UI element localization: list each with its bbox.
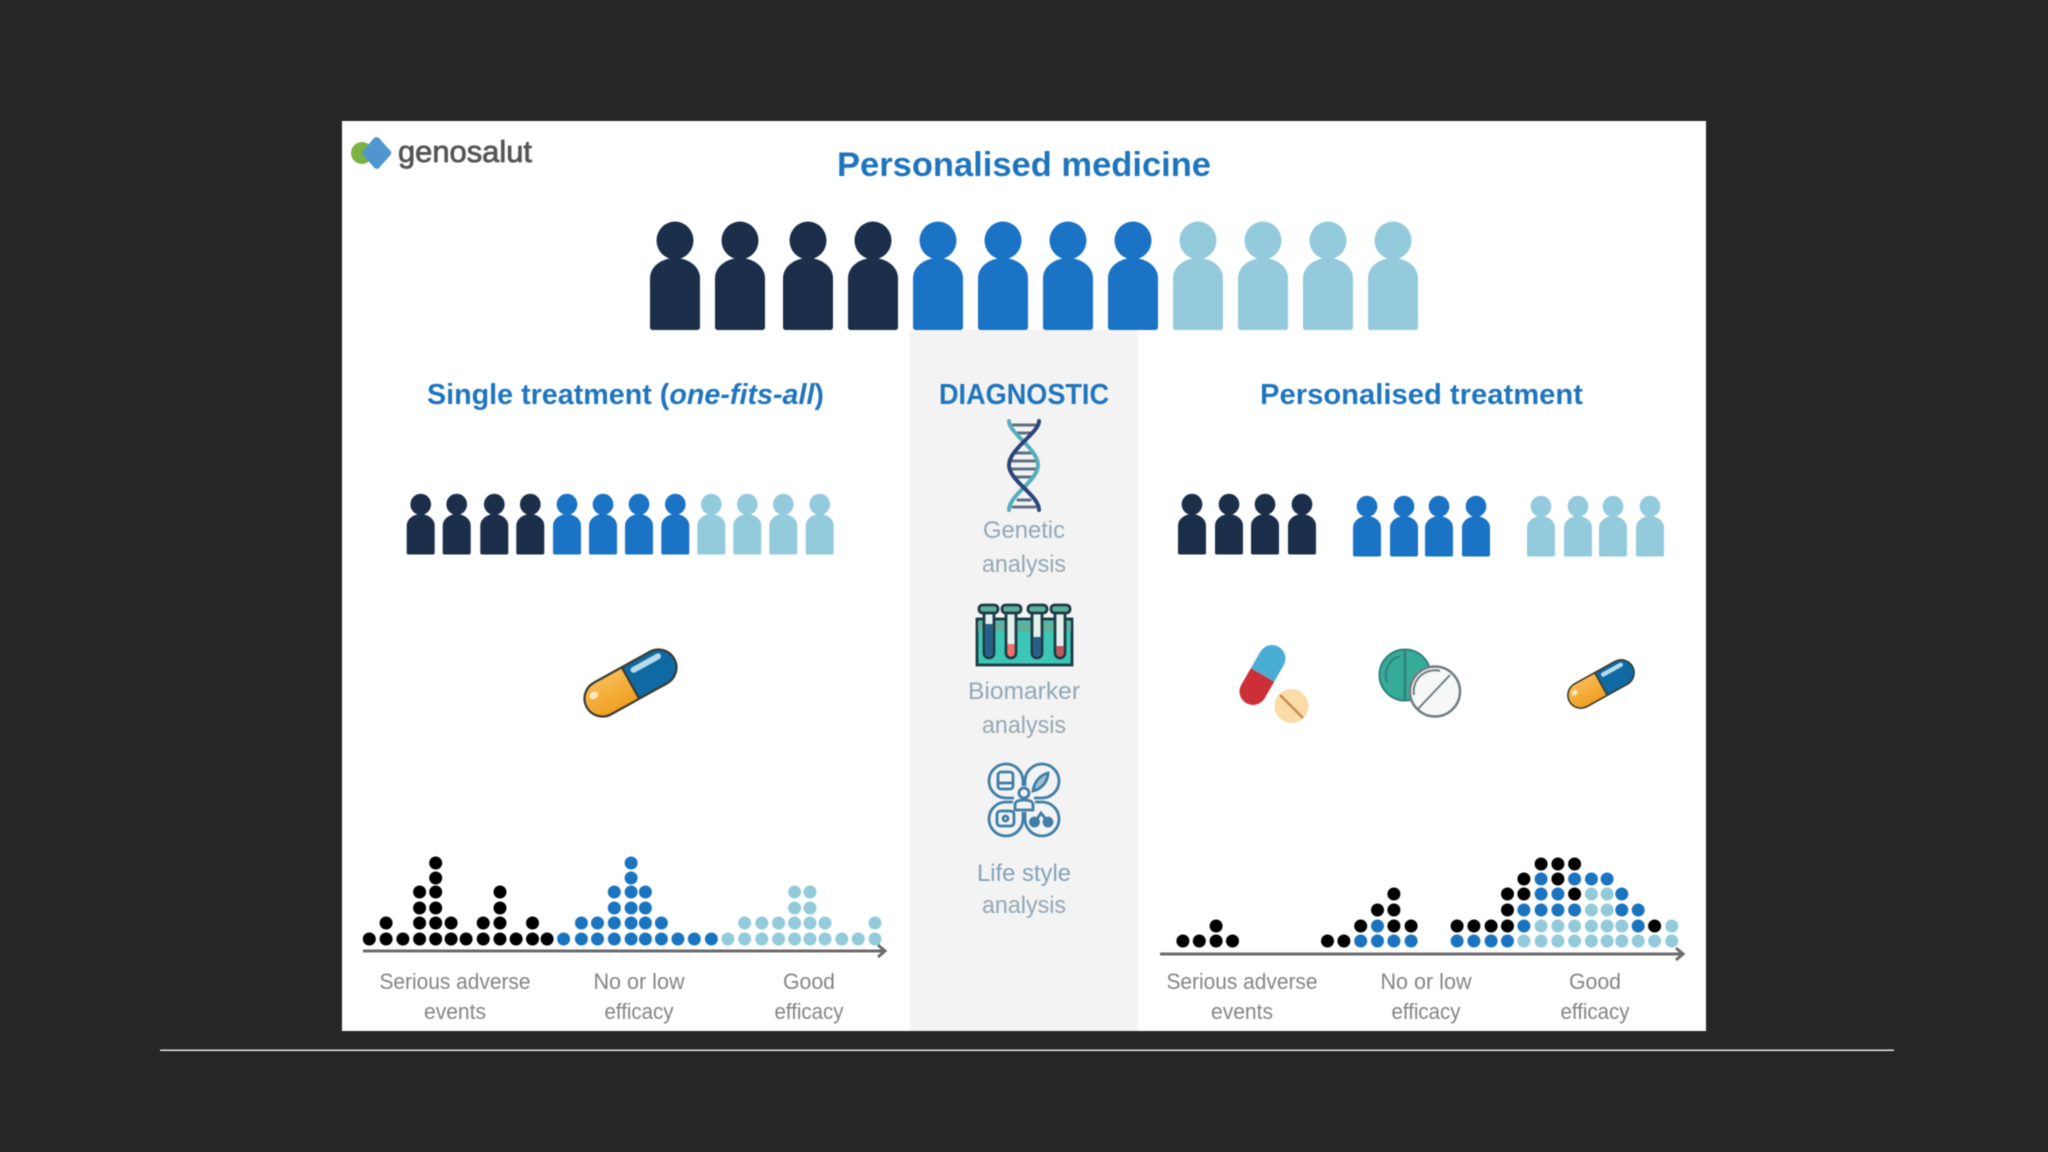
text: life style analysis: analysis <box>982 892 1066 919</box>
icon: capsule good efficacy <box>1563 655 1639 713</box>
people row: single treatment <box>407 494 834 554</box>
axis labels: personalised treatment: No or low <box>1380 969 1472 994</box>
icon: red and blue pill with tablet <box>1235 640 1308 723</box>
axis labels: personalised treatment: events <box>1211 999 1273 1024</box>
people row: whole population <box>650 222 1418 330</box>
people group: personalised light <box>1527 496 1664 556</box>
arrow: single treatment axis <box>363 945 885 957</box>
people group: personalised blue <box>1353 496 1490 556</box>
dots: serious adverse events <box>363 856 554 946</box>
people group: personalised dark <box>1178 494 1316 554</box>
heading: personalised treatment: Personalised treatment <box>1260 379 1583 411</box>
bottom rule <box>160 1050 1894 1051</box>
icon: life style <box>989 764 1059 836</box>
axis labels: single treatment: Serious adverse <box>380 969 530 994</box>
axis labels: single treatment: Good <box>783 969 835 994</box>
text: biomarker analysis: analysis <box>982 712 1066 739</box>
axis labels: single treatment: efficacy <box>604 999 674 1024</box>
heading: single treatment: Single treatment (one-fits-all) <box>427 379 824 411</box>
text: life style analysis <box>977 860 1071 919</box>
axis labels: personalised treatment: Serious adverse <box>1166 969 1318 994</box>
axis labels: single treatment <box>380 969 844 1024</box>
axis labels: single treatment: No or low <box>594 969 685 994</box>
axis labels: personalised treatment: efficacy <box>1560 999 1630 1024</box>
icon: DNA helix <box>1009 421 1039 510</box>
dot plot: personalised treatment <box>1176 858 1678 948</box>
panel: infographic card <box>342 121 1706 1031</box>
axis labels: personalised treatment: efficacy <box>1392 999 1460 1024</box>
text: life style analysis: Life style <box>977 860 1071 887</box>
text: genetic analysis: analysis <box>982 551 1066 578</box>
icon: capsule single treatment <box>578 643 683 723</box>
text: genetic analysis <box>982 517 1066 578</box>
text: genetic analysis: Genetic <box>983 517 1065 544</box>
axis labels: personalised treatment: Good <box>1569 969 1621 994</box>
dots: blue <box>1354 872 1645 948</box>
axis labels: single treatment: events <box>424 999 486 1024</box>
heading: diagnostic: DIAGNOSTIC <box>939 379 1109 411</box>
arrow: personalised treatment axis <box>1160 948 1683 960</box>
icon: green and white tablets <box>1380 650 1460 716</box>
icon: biomarker test tubes <box>977 605 1072 665</box>
dots: light blue <box>1517 888 1678 948</box>
title: Personalised medicine <box>837 146 1211 184</box>
dot plot: single treatment <box>363 856 882 946</box>
dots: no or low efficacy <box>557 856 718 946</box>
dots: good efficacy <box>721 886 882 946</box>
logo: genosalut: genosalut <box>398 134 532 169</box>
dots: black <box>1176 858 1661 948</box>
text: biomarker analysis: Biomarker <box>968 678 1080 705</box>
axis labels: personalised treatment <box>1166 969 1630 1024</box>
text: biomarker analysis <box>968 678 1080 739</box>
axis labels: single treatment: efficacy <box>774 999 844 1024</box>
panel: diagnostic column <box>910 330 1138 1031</box>
